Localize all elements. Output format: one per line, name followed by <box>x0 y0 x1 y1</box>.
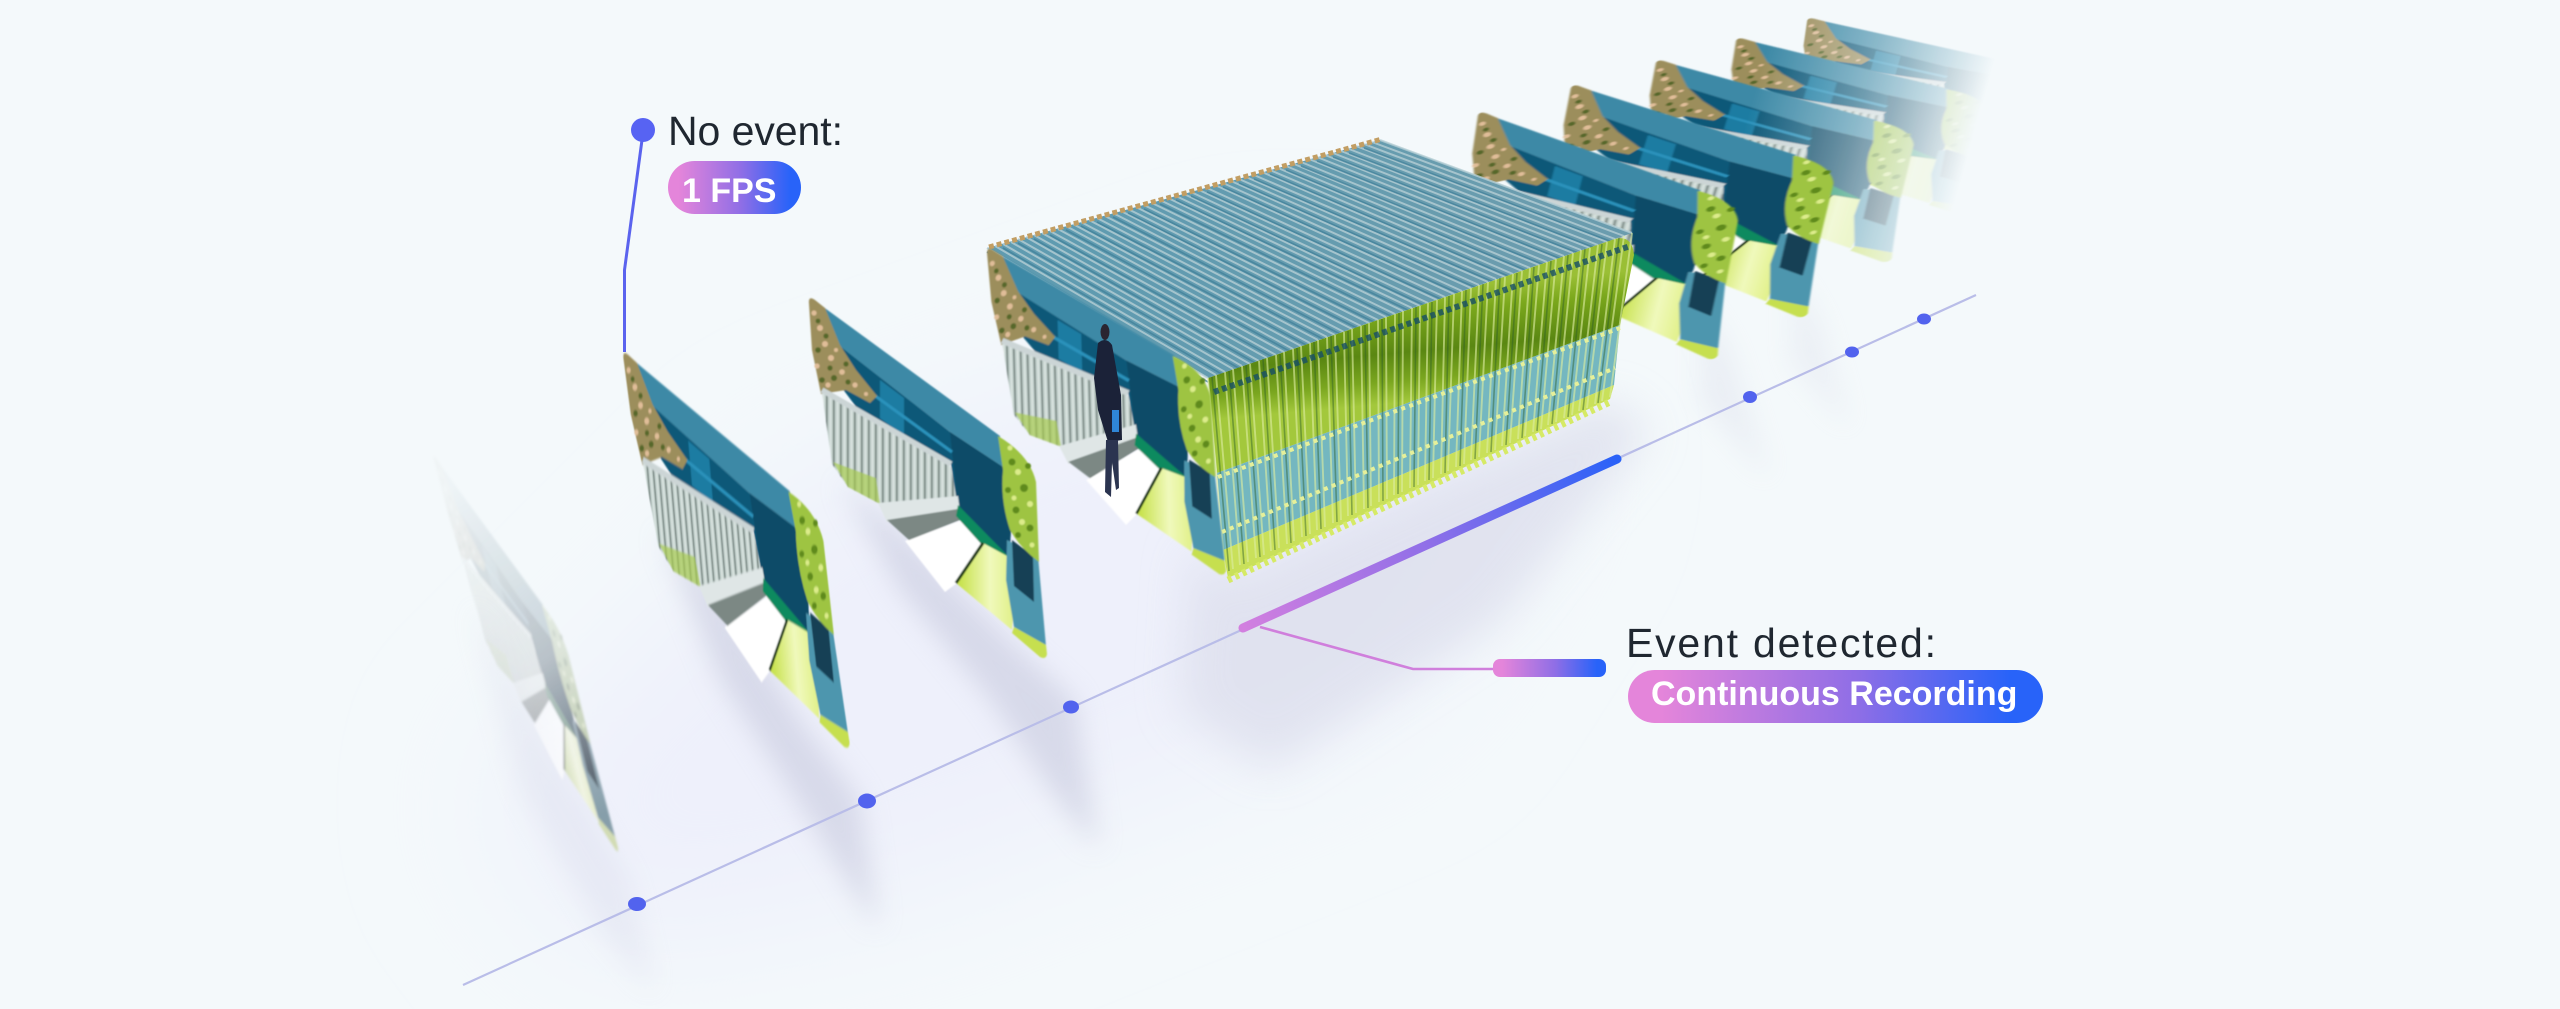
event range bar on the timeline <box>1243 459 1617 628</box>
pill: 1 FPS: 1 FPS <box>682 172 776 210</box>
faded frames at far right <box>1648 18 1986 262</box>
floor shadows <box>470 270 1850 995</box>
frame 4: front of the event stack <box>987 206 1226 617</box>
frame 3 <box>809 298 1047 658</box>
stack side face: vine band <box>1208 238 1634 473</box>
timeline axis <box>463 295 1976 985</box>
stack side face: lime band <box>1223 385 1614 578</box>
frame 6 <box>1487 40 1891 362</box>
event frame stack <box>987 139 1634 580</box>
no-event connector dot <box>631 118 655 142</box>
frame 2 <box>623 323 850 778</box>
pill: Continuous Recording <box>1628 670 2043 723</box>
stack lime dashes <box>1218 328 1620 532</box>
frame 8 <box>1730 38 1972 208</box>
stack shoulder edge <box>1214 246 1630 392</box>
event connector end pill <box>1493 659 1606 677</box>
pill: 1 FPS <box>668 161 801 214</box>
frame 7 <box>1648 60 1914 262</box>
frame 1: faded <box>448 496 620 852</box>
label: No event: No event: <box>668 108 843 154</box>
stack side face: wall band <box>1217 325 1620 550</box>
frame 9 <box>1802 18 1986 150</box>
frame 5 <box>1406 74 1789 398</box>
event connector line <box>1260 627 1495 669</box>
timeline dots <box>628 314 1931 911</box>
label: Event detected: Event detected: <box>1626 620 1936 666</box>
no-event connector line <box>624 140 642 352</box>
stack top face <box>987 139 1632 382</box>
person walking <box>1094 324 1122 497</box>
pill: Continuous Recording: Continuous Recording <box>1651 675 2017 713</box>
stack side ribs <box>1208 233 1632 572</box>
stack bottom teeth <box>1228 402 1610 580</box>
